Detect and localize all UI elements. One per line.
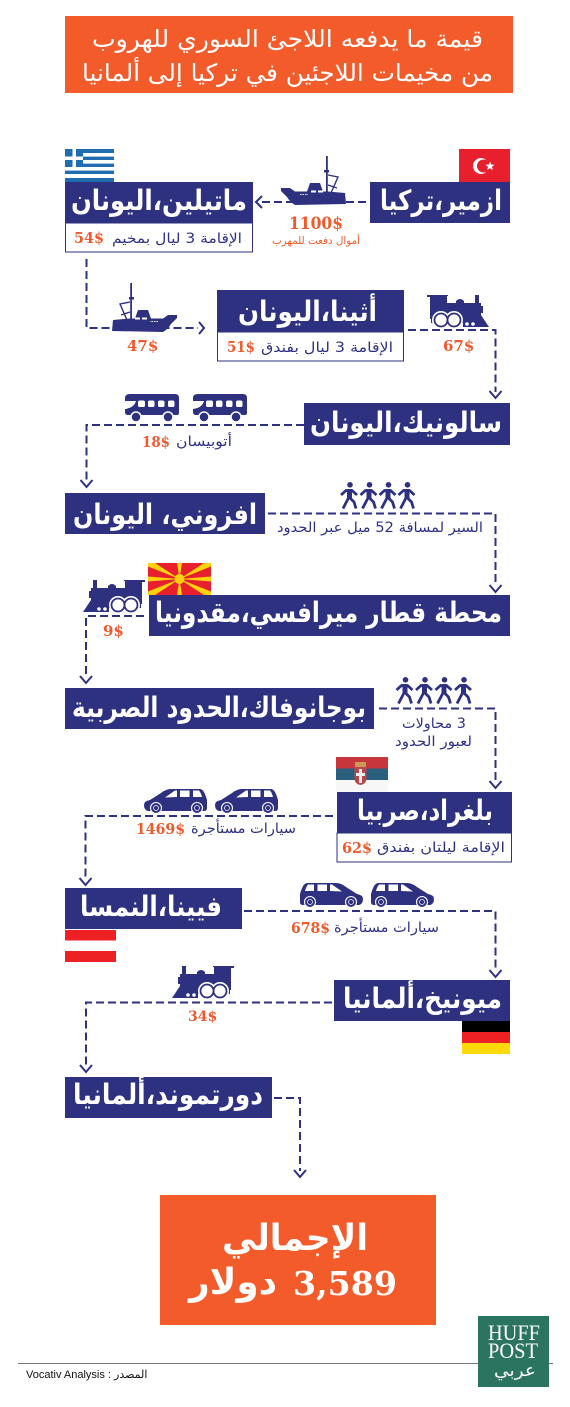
place: Belgrade, Serbia with hotel stay: الإقامة ليلتان بفندق [377, 840, 505, 856]
cost: rental cars 1469 dollars: 1469$ [136, 820, 185, 838]
place: Mytilene, Greece with camp stay: ماتيلين،اليونان [71, 184, 247, 217]
icons: rental cars [300, 883, 434, 908]
place: Mytilene, Greece with camp stay [65, 182, 253, 252]
cost: rental cars 1469 dollars [136, 818, 296, 838]
total panel: 3,589 [293, 1264, 397, 1303]
place: Belgrade, Serbia with hotel stay [337, 792, 512, 862]
cost: rental cars 678 dollars: سيارات مستأجرة [334, 917, 439, 936]
place: Dortmund, Germany: دورتموند،ألمانيا [73, 1076, 263, 1111]
cost: 1100 dollars paid to smuggler: أموال دفعت للمهرب [272, 233, 360, 247]
place: Athens, Greece with hotel stay [217, 290, 404, 361]
icon: train [427, 295, 489, 329]
place: Izmir, Turkey: ازمير،تركيا [380, 184, 502, 217]
caption: 52 mile walk across the border: السير لمسافة 52 ميل عبر الحدود [277, 520, 483, 536]
flag: Turkey [459, 149, 510, 182]
icons: rental cars [144, 789, 278, 814]
icon: boat [281, 156, 346, 205]
arrow: Dortmund to total [274, 1098, 306, 1177]
place: Thessaloniki, Greece: سالونيك،اليونان [310, 406, 502, 439]
place: Athens, Greece with hotel stay: 51$ [227, 338, 255, 356]
flag: Serbia [336, 757, 388, 792]
arrow: Vienna to Munich [244, 911, 502, 977]
cost: bus 18 dollars: 18$ [142, 433, 170, 451]
cost: rental cars 678 dollars [291, 917, 439, 937]
arrow: Munich to Dortmund [80, 1002, 332, 1072]
place: Idomeni, Greece: افزوني، اليونان [73, 498, 257, 531]
icons: walkers [341, 482, 414, 508]
source line: Vocativ Analysis : المصدر [26, 1369, 147, 1381]
flag: Austria [65, 930, 116, 962]
cost: rental cars 1469 dollars: سيارات مستأجرة [191, 818, 296, 837]
title banner: قيمة ما يدفعه اللاجئ السوري للهروب [92, 25, 483, 53]
arrow: Idomeni to Miravci station [268, 514, 502, 592]
total panel: الإجمالي [222, 1218, 368, 1259]
arrow: Belgrade to Vienna [80, 816, 333, 885]
place: Vienna, Austria: فيينا،النمسا [80, 890, 222, 923]
place: Miravci train station, Macedonia [149, 595, 510, 636]
icon: train [83, 580, 145, 614]
cost: 1100 dollars paid to smuggler [272, 214, 360, 247]
cost: 67 dollars: 67$ [443, 337, 474, 355]
flag: Germany [462, 1021, 510, 1054]
place: Belgrade, Serbia with hotel stay: بلغراد،صربيا [357, 794, 493, 827]
title banner [65, 16, 513, 93]
arrow: Bogovadja to Belgrade [379, 708, 502, 788]
place: Miravci train station, Macedonia: محطة قطار ميرافسي،مقدونيا [155, 596, 502, 629]
cost: bus 18 dollars: أتوبيسان [176, 432, 232, 450]
logo: HuffPost Arabi [478, 1316, 549, 1387]
logo: HuffPost Arabi: عربي [494, 1361, 536, 1381]
cost: 1100 dollars paid to smuggler: 1100$ [289, 214, 343, 234]
total panel [160, 1195, 436, 1325]
caption: 3 attempts to cross the border: 3 محاولات [402, 716, 466, 732]
title banner: من مخيمات اللاجئين في تركيا إلى ألمانيا [82, 57, 493, 88]
place: Bogovadja, Serbian border [65, 688, 374, 729]
logo: HuffPost Arabi: HUFF [488, 1320, 540, 1345]
place: Athens, Greece with hotel stay: أثينا،اليونان [238, 293, 377, 328]
place: Bogovadja, Serbian border: بوجانوفاك،الحدود الصربية [72, 691, 366, 724]
arrow: Athens to Thessaloniki [408, 330, 502, 398]
cost: 47 dollars: 47$ [127, 337, 158, 355]
arrow: Mytilene to Athens [86, 259, 204, 334]
place: Mytilene, Greece with camp stay: 54$ [74, 229, 104, 247]
arrow: Miravci to Bogovadja [80, 616, 144, 683]
flag: Greece [65, 149, 114, 182]
total panel: دولار [187, 1262, 277, 1303]
icons: buses [125, 394, 247, 422]
cost: rental cars 678 dollars: 678$ [291, 919, 330, 937]
caption: 3 attempts to cross the border [395, 716, 472, 750]
cost: 9 dollars: 9$ [103, 622, 124, 640]
arrow: Thessaloniki to Idomeni [80, 425, 304, 487]
cost: bus 18 dollars [142, 432, 232, 451]
place: Athens, Greece with hotel stay: الإقامة 3 ليال بفندق [261, 340, 393, 356]
caption: 3 attempts to cross the border: لعبور الحدود [395, 734, 472, 750]
place: Mytilene, Greece with camp stay: الإقامة 3 ليال بمخيم [112, 231, 242, 247]
place: Belgrade, Serbia with hotel stay: 62$ [342, 839, 372, 857]
cost: 34 dollars: 34$ [188, 1009, 217, 1025]
icons: walkers [396, 677, 471, 704]
icon: boat [112, 283, 177, 332]
flag: Macedonia [148, 563, 211, 595]
place: Izmir, Turkey [370, 182, 510, 223]
icon: train [172, 966, 234, 1000]
arrow: Izmir to Mytilene [256, 196, 366, 208]
logo: HuffPost Arabi: POST [488, 1338, 539, 1363]
place: Munich, Germany: ميونيخ،ألمانيا [343, 980, 502, 1015]
